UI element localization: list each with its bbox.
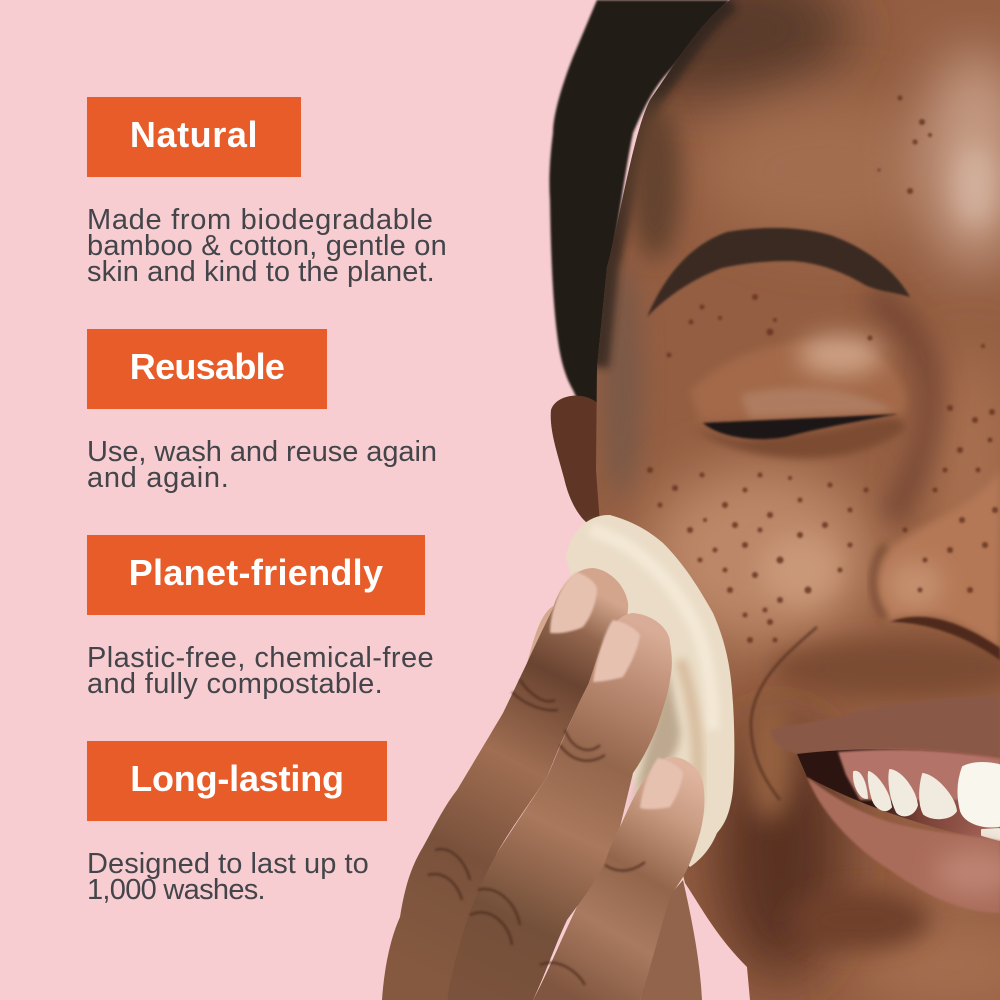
teeth [854, 763, 999, 840]
text: Natural description [87, 204, 447, 288]
text: Natural description: bamboo & cotton, gentle on [87, 230, 447, 262]
text: Long-lasting description [87, 848, 369, 906]
photo: woman cleansing her face with a reusable pad [382, 0, 1000, 1000]
cotton pad [566, 515, 734, 867]
heading: Reusable [87, 329, 327, 409]
text: Reusable description: and again. [87, 462, 229, 494]
text: Natural description: Made from biodegradable [87, 204, 434, 236]
fingernails [550, 572, 683, 809]
thumb behind fingers [640, 880, 702, 1000]
hair [549, 0, 730, 470]
text: Planet-friendly description: and fully compostable. [87, 668, 383, 700]
heading: Planet-friendly: Planet-friendly [129, 552, 383, 593]
closed eye and lashes [690, 335, 906, 458]
text: Reusable description: Use, wash and reuse again [87, 436, 437, 468]
knuckle creases [428, 680, 645, 985]
upper lip [770, 697, 1000, 758]
heading: Natural: Natural [130, 114, 258, 155]
heading: Planet-friendly [87, 535, 425, 615]
lower lip [807, 777, 1000, 913]
text: Long-lasting description: 1,000 washes. [87, 874, 265, 906]
text: Reusable description [87, 436, 437, 494]
text: Natural description: skin and kind to the planet. [87, 256, 435, 288]
eyebrow [647, 228, 910, 317]
pale little finger tip [527, 606, 560, 670]
mouth interior and gums [797, 749, 1000, 842]
face skin [570, 0, 1000, 1000]
hand with fingers and nails [382, 568, 704, 1000]
freckles [647, 96, 998, 643]
heading: Long-lasting: Long-lasting [130, 758, 344, 799]
heading: Reusable: Reusable [130, 346, 284, 387]
index finger [382, 568, 628, 1000]
text: Planet-friendly description [87, 642, 434, 700]
heading: Natural [87, 97, 301, 177]
text: Long-lasting description: Designed to last up to [87, 848, 369, 880]
nose [873, 470, 1000, 660]
ear [551, 396, 602, 528]
text: Planet-friendly description: Plastic-free, chemical-free [87, 642, 434, 674]
middle finger [447, 613, 672, 1000]
nasolabial fold [751, 627, 817, 800]
ring finger [533, 757, 704, 1000]
heading: Long-lasting [87, 741, 387, 821]
